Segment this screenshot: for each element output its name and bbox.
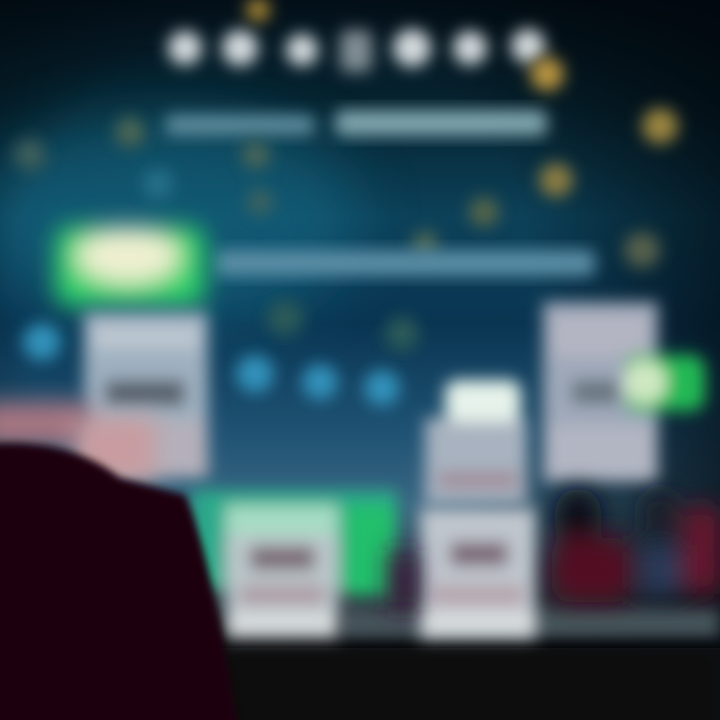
- subtitle: [165, 110, 547, 136]
- panel: right tall card: [543, 302, 658, 482]
- panel: left white card: [84, 312, 208, 478]
- icon row: blue circles: [23, 323, 400, 406]
- audience silhouettes: [388, 488, 720, 610]
- panel: top-left green card: [55, 226, 205, 306]
- panel: right green badge: [623, 355, 705, 411]
- floor band: [220, 608, 720, 720]
- central banner: [215, 250, 595, 276]
- panel: bottom green card: [192, 490, 397, 638]
- icons: gold stars: [14, 0, 678, 351]
- panel: bottom white card: [420, 508, 536, 638]
- foreground: person silhouette: [0, 402, 240, 720]
- title: [168, 29, 545, 72]
- panel: middle white card: [425, 380, 527, 504]
